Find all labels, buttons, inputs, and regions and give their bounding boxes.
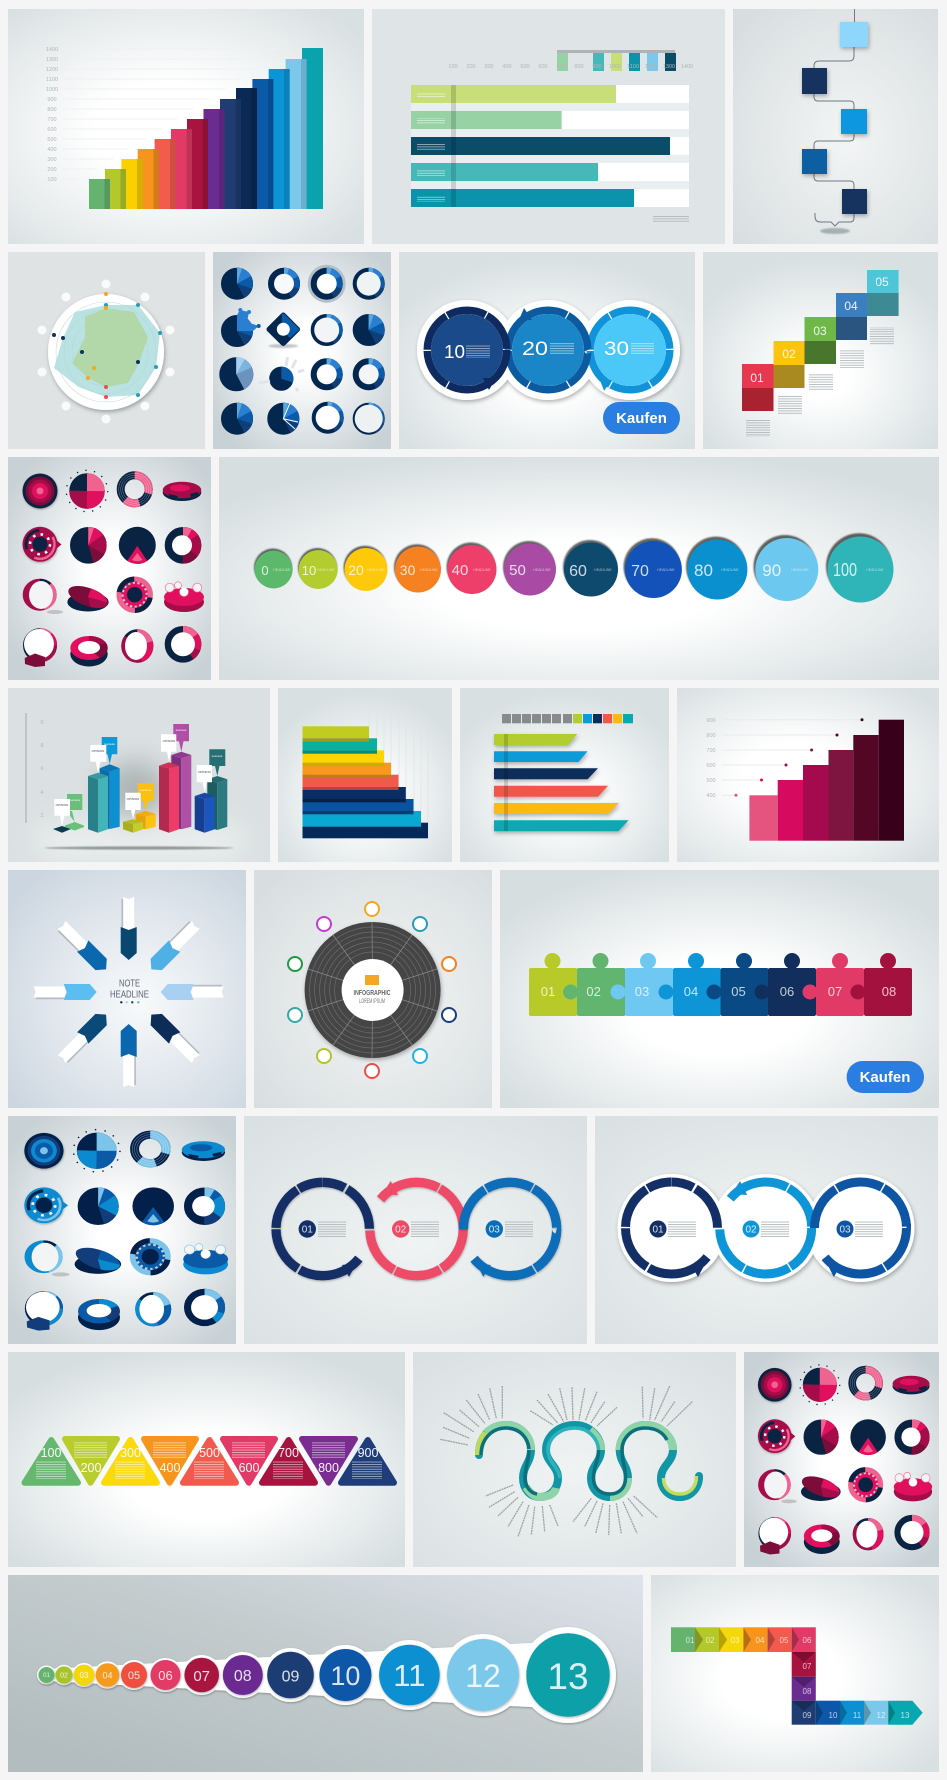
axis labels: 800 xyxy=(706,733,716,739)
arrow numbers: 01 xyxy=(686,1636,695,1645)
step boxes xyxy=(742,270,899,411)
circle discs xyxy=(255,536,894,602)
percentage numbers: 70 xyxy=(631,563,649,580)
note headline text xyxy=(110,979,149,1000)
panel: 3D rainbow staircase bar chart: 700 xyxy=(47,117,57,123)
panel: three arrow rings on white discs xyxy=(595,1116,938,1344)
column tags: success xyxy=(69,798,81,802)
percentage numbers: 40 xyxy=(452,562,468,579)
white circle backing xyxy=(417,300,680,400)
headline captions: HEADLINE xyxy=(594,568,612,572)
percentage numbers: 10 xyxy=(302,563,316,578)
panel: 3D rainbow staircase bar chart: 900 xyxy=(47,97,57,103)
axis labels: 800 xyxy=(574,64,584,70)
axis labels xyxy=(706,718,716,799)
axis labels: 6 xyxy=(40,766,44,772)
ring 03: 03 xyxy=(839,1225,851,1236)
circle 10: 10 xyxy=(444,341,465,362)
column tags: success xyxy=(140,788,152,792)
center title: INFOGRAPHIC xyxy=(354,988,391,997)
panel: 3D rainbow staircase bar chart: 1400 xyxy=(46,47,58,53)
axis labels: 700 xyxy=(706,748,716,754)
column tags: success xyxy=(104,742,115,746)
ring 02: 02 xyxy=(745,1225,757,1236)
step boxes: 05 xyxy=(875,275,889,289)
ground shadow xyxy=(44,846,234,850)
connector line xyxy=(814,9,854,226)
puzzle numbers xyxy=(541,984,896,999)
soft center glow and shade xyxy=(40,762,240,854)
circle 30 xyxy=(590,310,670,391)
row 1 xyxy=(229,265,381,303)
headline captions: HEADLINE xyxy=(721,568,739,572)
ring 01: 01 xyxy=(652,1225,664,1236)
leader dots xyxy=(734,718,864,797)
column tags: OPINION xyxy=(127,797,139,801)
panel: 3D rainbow staircase bar chart: 400 xyxy=(47,147,57,153)
panel: pink chart set repeat xyxy=(744,1352,939,1567)
ring 01 xyxy=(276,1182,369,1277)
headline captions: HEADLINE xyxy=(866,568,884,572)
triangle numbers xyxy=(41,1446,378,1475)
triangle numbers: 600 xyxy=(239,1461,259,1475)
stacked bars xyxy=(302,726,428,838)
buy button: Kaufen xyxy=(616,410,667,427)
radar disc xyxy=(48,292,164,410)
circle numbers: 01 xyxy=(43,1673,50,1679)
percentage numbers: 80 xyxy=(694,561,713,580)
sixteen pink charts xyxy=(756,1365,932,1554)
scale squares xyxy=(502,714,633,723)
arrow numbers: 09 xyxy=(803,1711,812,1720)
axis labels: 600 xyxy=(706,763,716,769)
teal column xyxy=(88,773,108,833)
triangle numbers: 100 xyxy=(41,1446,61,1460)
triangle numbers: 800 xyxy=(318,1461,339,1475)
ring 01 xyxy=(626,1182,718,1277)
circle numbers: 10 xyxy=(330,1661,360,1691)
circle 20 xyxy=(508,308,588,390)
column tags xyxy=(54,724,225,826)
ring 02 label: 02 xyxy=(395,1225,407,1236)
axis labels: 0 xyxy=(40,720,44,726)
percentage numbers: 20 xyxy=(348,562,364,578)
axis labels: 400 xyxy=(502,64,512,70)
blue column xyxy=(195,793,215,833)
axis labels: 300 xyxy=(484,64,494,70)
dark teal column xyxy=(207,776,227,830)
axis labels: 200 xyxy=(466,64,476,70)
colored circles xyxy=(38,1633,610,1717)
axis xyxy=(25,713,27,823)
circle 30: 30 xyxy=(604,339,629,360)
percentage numbers: 90 xyxy=(762,561,781,580)
percentage numbers: 100 xyxy=(833,560,857,580)
headline captions: HEADLINE xyxy=(473,568,491,572)
arrow numbers: 03 xyxy=(731,1636,740,1645)
column tags: OPINION xyxy=(56,803,68,807)
axis labels: 400 xyxy=(706,793,716,799)
row 2 xyxy=(229,308,377,348)
wave ribbon xyxy=(479,1425,699,1497)
triangle numbers: 200 xyxy=(81,1461,101,1475)
panel: 3D rainbow staircase bar chart xyxy=(8,9,364,244)
panel: Z-shaped arrow path 01-13 xyxy=(651,1575,939,1772)
ring 03 xyxy=(463,1182,557,1277)
headline captions: HEADLINE xyxy=(317,568,335,572)
ring 02 xyxy=(720,1181,812,1274)
axis labels: 900 xyxy=(592,64,602,70)
step captions xyxy=(746,327,894,437)
axis labels: 2 xyxy=(40,813,44,819)
dots xyxy=(120,1001,140,1004)
legend tabs xyxy=(557,50,676,71)
headline captions: HEADLINE xyxy=(367,568,385,572)
staircase bars xyxy=(89,48,323,209)
panel: growing circles 01-13 xyxy=(8,1575,643,1772)
panel: three open arrow rings xyxy=(244,1116,587,1344)
panel: vertical timeline of boxes xyxy=(733,9,938,244)
white discs xyxy=(618,1174,914,1282)
ring 03 xyxy=(814,1182,906,1277)
row 3 xyxy=(228,357,379,391)
radar label discs xyxy=(38,280,174,424)
step boxes: 02 xyxy=(782,347,796,361)
panel: stacked stair horizontal bars xyxy=(278,688,452,862)
panel: 3D rainbow staircase bar chart: 600 xyxy=(47,127,57,133)
percentage numbers: 50 xyxy=(509,562,526,579)
note headline text: HEADLINE xyxy=(110,989,149,1000)
chart note xyxy=(653,216,689,223)
panel: 3D rainbow staircase bar chart: 100 xyxy=(47,177,57,183)
panel: rising step boxes 01-05 xyxy=(703,252,938,449)
axis labels: 1000 xyxy=(609,64,621,70)
arrow numbers: 05 xyxy=(780,1636,789,1645)
panel: 3D rainbow staircase bar chart: 500 xyxy=(47,137,57,143)
puzzle numbers: 06 xyxy=(780,984,794,999)
ring 03 label xyxy=(486,1220,533,1238)
sixteen pink charts xyxy=(20,470,204,667)
panel: 3D rainbow staircase bar chart: 1000 xyxy=(46,87,58,93)
white blob backing xyxy=(37,1627,616,1723)
dark ring xyxy=(305,922,441,1058)
panel: horizontal progress bars xyxy=(372,9,725,244)
ring 01 label xyxy=(299,1220,346,1238)
arrow numbers: 10 xyxy=(829,1711,838,1720)
panel: 3D rainbow staircase bar chart: 300 xyxy=(47,157,57,163)
panel: eight arrows around note headline xyxy=(8,870,246,1108)
step boxes: 01 xyxy=(750,371,764,385)
axis labels: 600 xyxy=(538,64,548,70)
column tags: OPINION xyxy=(92,749,104,753)
arrow numbers xyxy=(686,1636,910,1720)
ring 02 label xyxy=(392,1220,439,1238)
circle numbers: 11 xyxy=(393,1658,425,1693)
triangle numbers: 400 xyxy=(160,1461,180,1475)
circle numbers: 08 xyxy=(234,1668,252,1685)
circle numbers: 13 xyxy=(547,1656,589,1697)
circle 20: 20 xyxy=(522,339,548,360)
puzzle pieces xyxy=(529,953,912,1016)
buy button xyxy=(847,1061,924,1093)
arrow numbers: 11 xyxy=(853,1711,862,1720)
arrow numbers: 06 xyxy=(803,1636,812,1645)
arrow numbers: 12 xyxy=(877,1711,886,1720)
axis labels: 8 xyxy=(40,743,44,749)
percentage numbers xyxy=(261,560,857,580)
radial caption lines xyxy=(440,1386,692,1537)
purple column xyxy=(171,752,191,829)
axis labels: 700 xyxy=(556,64,566,70)
step boxes: 04 xyxy=(844,299,858,313)
circle numbers: 09 xyxy=(282,1668,300,1686)
blue back column xyxy=(100,764,120,829)
column tags: success xyxy=(212,754,223,758)
panel: 3D rainbow staircase bar chart: 1300 xyxy=(46,57,58,63)
arrow numbers: 13 xyxy=(901,1711,910,1720)
headline captions: HEADLINE xyxy=(533,568,551,572)
axis labels: 500 xyxy=(520,64,530,70)
circle numbers: 02 xyxy=(60,1672,68,1680)
radial arrows xyxy=(34,897,224,1087)
triangle numbers: 500 xyxy=(199,1446,220,1460)
panel: slanted ribbon bars xyxy=(460,688,669,862)
panel: 3D rainbow staircase bar chart: 800 xyxy=(47,107,57,113)
percentage numbers: 0 xyxy=(261,563,269,578)
arrow numbers: 02 xyxy=(706,1636,715,1645)
column tags: OPINION xyxy=(198,770,211,774)
panel: blue chart set xyxy=(8,1116,236,1344)
step boxes: 03 xyxy=(813,324,827,338)
arrow numbers: 07 xyxy=(803,1662,812,1671)
panel: 3D rainbow staircase bar chart: 1100 xyxy=(46,77,58,83)
dark crescents xyxy=(254,533,892,599)
axis labels: 900 xyxy=(706,718,716,724)
panel: 3D rainbow staircase bar chart: 200 xyxy=(47,167,57,173)
note headline text: NOTE xyxy=(119,979,140,990)
pink column xyxy=(159,762,179,833)
panel: crimson stair chart xyxy=(677,688,939,862)
panel: interlocking triangles 100-900 xyxy=(8,1352,405,1567)
row 4 xyxy=(229,403,383,433)
panel: isometric 3D column chart xyxy=(8,688,270,862)
panel: wave ribbon with radial captions xyxy=(413,1352,736,1567)
chart axis labels and leader lines xyxy=(62,49,289,179)
arrow numbers: 04 xyxy=(756,1636,765,1645)
panel: puzzle chain 01-08 xyxy=(500,870,939,1108)
triangle numbers: 300 xyxy=(120,1446,141,1460)
axis labels: 1200 xyxy=(645,64,657,70)
panel: eleven colored percentage circles xyxy=(219,457,939,680)
arrow numbers: 08 xyxy=(803,1687,812,1696)
circle numbers: 12 xyxy=(465,1658,501,1694)
axis labels: 1100 xyxy=(627,64,639,70)
panel: blue donut and pie charts xyxy=(213,252,391,449)
axis labels: 500 xyxy=(706,778,716,784)
headline captions: HEADLINE xyxy=(420,568,438,572)
headline captions xyxy=(273,568,884,572)
puzzle numbers: 05 xyxy=(731,984,746,999)
ribbons xyxy=(494,734,629,831)
panel: radar chart xyxy=(8,252,205,449)
orange block xyxy=(136,811,156,829)
panel: three joined circles 10 20 30 xyxy=(399,252,695,449)
triangle body text xyxy=(36,1442,382,1479)
headline captions: HEADLINE xyxy=(657,568,675,572)
circle numbers: 06 xyxy=(158,1668,173,1683)
buy button: Kaufen xyxy=(860,1069,910,1086)
triangle numbers: 700 xyxy=(278,1446,299,1460)
axis labels xyxy=(40,720,44,819)
column tags: OPINION xyxy=(163,739,175,743)
columns xyxy=(53,752,227,833)
buy button xyxy=(603,402,680,434)
guide lines xyxy=(369,712,428,838)
olive block xyxy=(123,819,143,833)
timeline boxes xyxy=(802,22,868,214)
puzzle numbers: 07 xyxy=(828,984,842,999)
center title xyxy=(354,975,391,1005)
bars xyxy=(411,85,689,207)
circle numbers: 04 xyxy=(102,1670,113,1680)
ring 03 label: 03 xyxy=(489,1225,500,1236)
center title: LOREM IPSUM xyxy=(359,999,385,1005)
axis labels xyxy=(448,64,693,70)
leader lines xyxy=(722,720,862,795)
puzzle numbers: 04 xyxy=(684,984,698,999)
circle 10 xyxy=(427,310,507,390)
puzzle numbers: 03 xyxy=(635,984,649,999)
headline captions: HEADLINE xyxy=(273,568,291,572)
panel: pink chart set xyxy=(8,457,211,680)
triangle numbers: 900 xyxy=(358,1446,378,1460)
circle numbers xyxy=(43,1656,589,1697)
column tags: success xyxy=(176,728,187,732)
axis labels: 100 xyxy=(448,64,458,70)
percentage numbers: 30 xyxy=(400,562,416,578)
bubble shadow xyxy=(820,228,850,234)
puzzle numbers: 01 xyxy=(541,984,555,999)
axis labels: 4 xyxy=(40,790,44,796)
axis labels: 1300 xyxy=(663,64,675,70)
puzzle numbers: 08 xyxy=(882,984,896,999)
sixteen blue charts xyxy=(22,1130,228,1331)
headline captions: HEADLINE xyxy=(791,568,809,572)
columns xyxy=(749,720,904,841)
ring 01 label: 01 xyxy=(302,1225,313,1236)
panel: dark ring infographic with ten badges xyxy=(254,870,492,1108)
axis labels: 1400 xyxy=(681,64,693,70)
percentage numbers: 60 xyxy=(569,563,587,580)
ring 02 xyxy=(370,1181,463,1276)
circle numbers: 03 xyxy=(80,1671,89,1680)
badges xyxy=(288,902,456,1078)
circle numbers: 07 xyxy=(193,1668,210,1685)
panel: 3D rainbow staircase bar chart: 1200 xyxy=(46,67,58,73)
circle numbers: 05 xyxy=(128,1670,140,1682)
puzzle numbers: 02 xyxy=(586,984,601,999)
colored arrow blocks xyxy=(671,1627,923,1725)
triangles xyxy=(24,1439,394,1483)
